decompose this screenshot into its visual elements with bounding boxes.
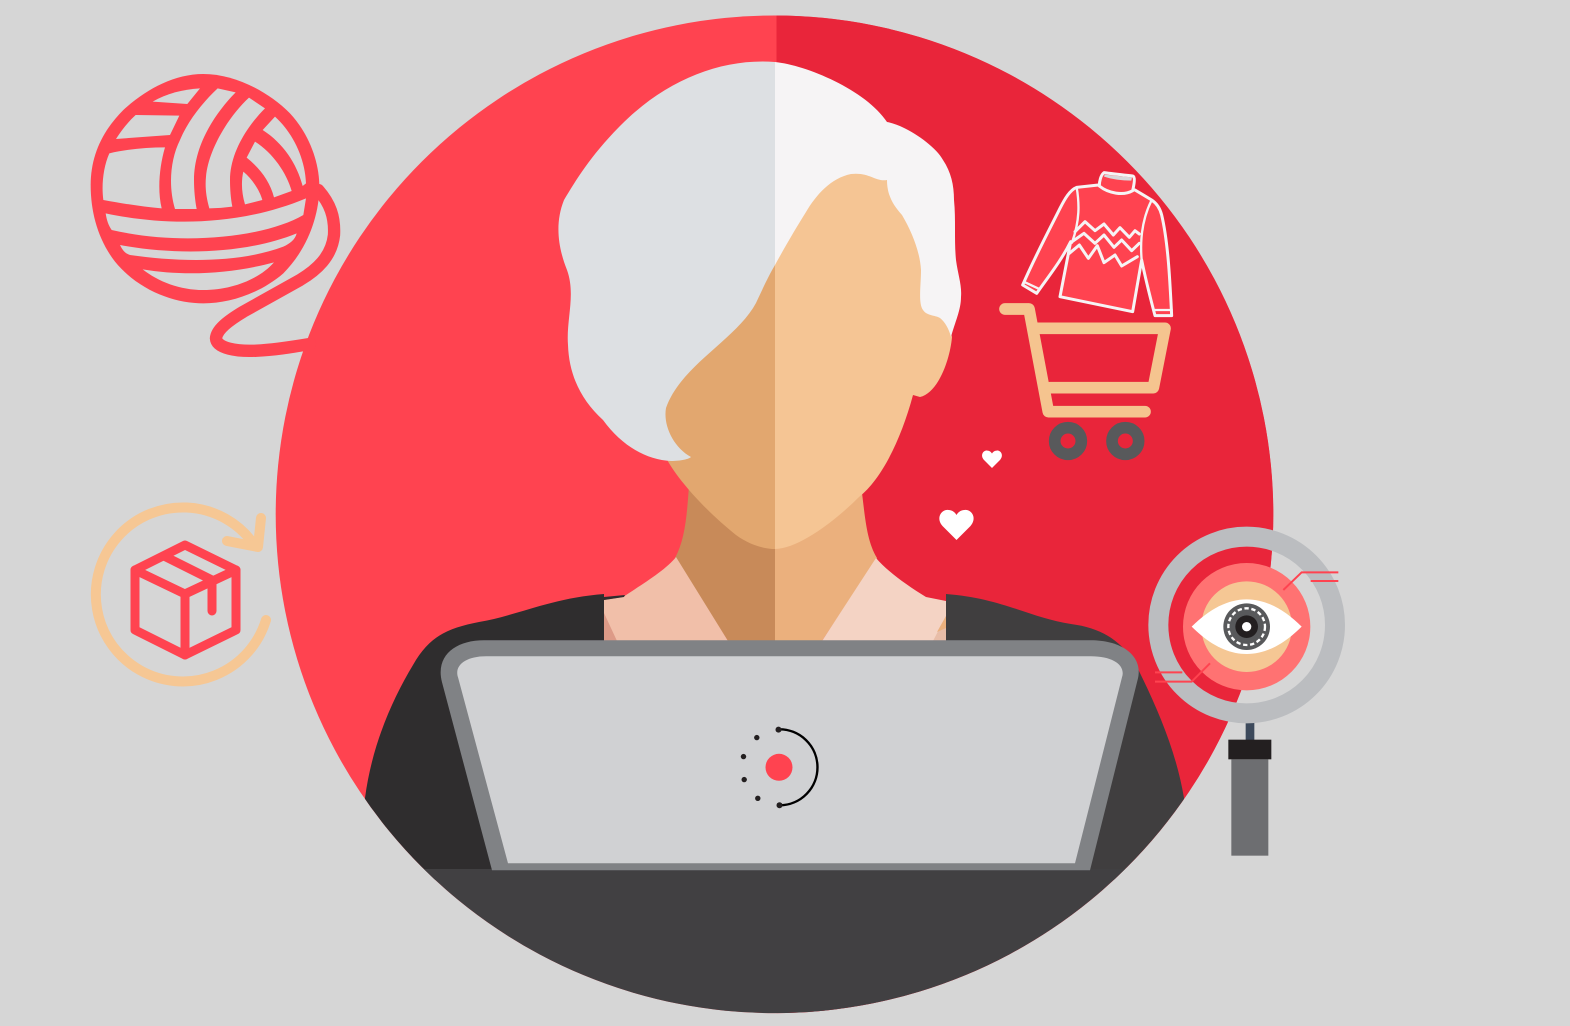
- face: [641, 170, 952, 549]
- laptop: [441, 640, 1139, 870]
- icon: shopping cart: [1005, 309, 1165, 454]
- red background circle: [276, 0, 1296, 1026]
- icon: sweater: [1023, 173, 1172, 316]
- ball silhouette: [91, 74, 319, 303]
- lens ring: [1158, 537, 1335, 713]
- magnifier handle: [1228, 722, 1271, 856]
- scan lines: [1155, 572, 1338, 682]
- icon: magnifying glass with eye: [1155, 537, 1338, 856]
- target circles: [1183, 563, 1310, 690]
- yarn tail: [216, 190, 334, 351]
- parcel box: [135, 545, 236, 655]
- circular return arrow: [96, 507, 266, 681]
- icon: yarn ball: [91, 74, 334, 351]
- ball gaps: [103, 88, 306, 290]
- infographic illustration: [90, 16, 1345, 1014]
- laptop frame: [441, 640, 1139, 870]
- laptop logo: [741, 727, 817, 808]
- icon: small heart: [982, 451, 1002, 468]
- neck: [675, 485, 877, 641]
- blouse collar: [604, 557, 946, 641]
- eye: [1192, 599, 1302, 654]
- icon: returned parcel with circular arrow: [96, 507, 266, 681]
- icon: large heart: [939, 510, 974, 540]
- jacket and torso: [364, 594, 1184, 1014]
- laptop lid: [457, 656, 1123, 863]
- hair: [558, 62, 961, 461]
